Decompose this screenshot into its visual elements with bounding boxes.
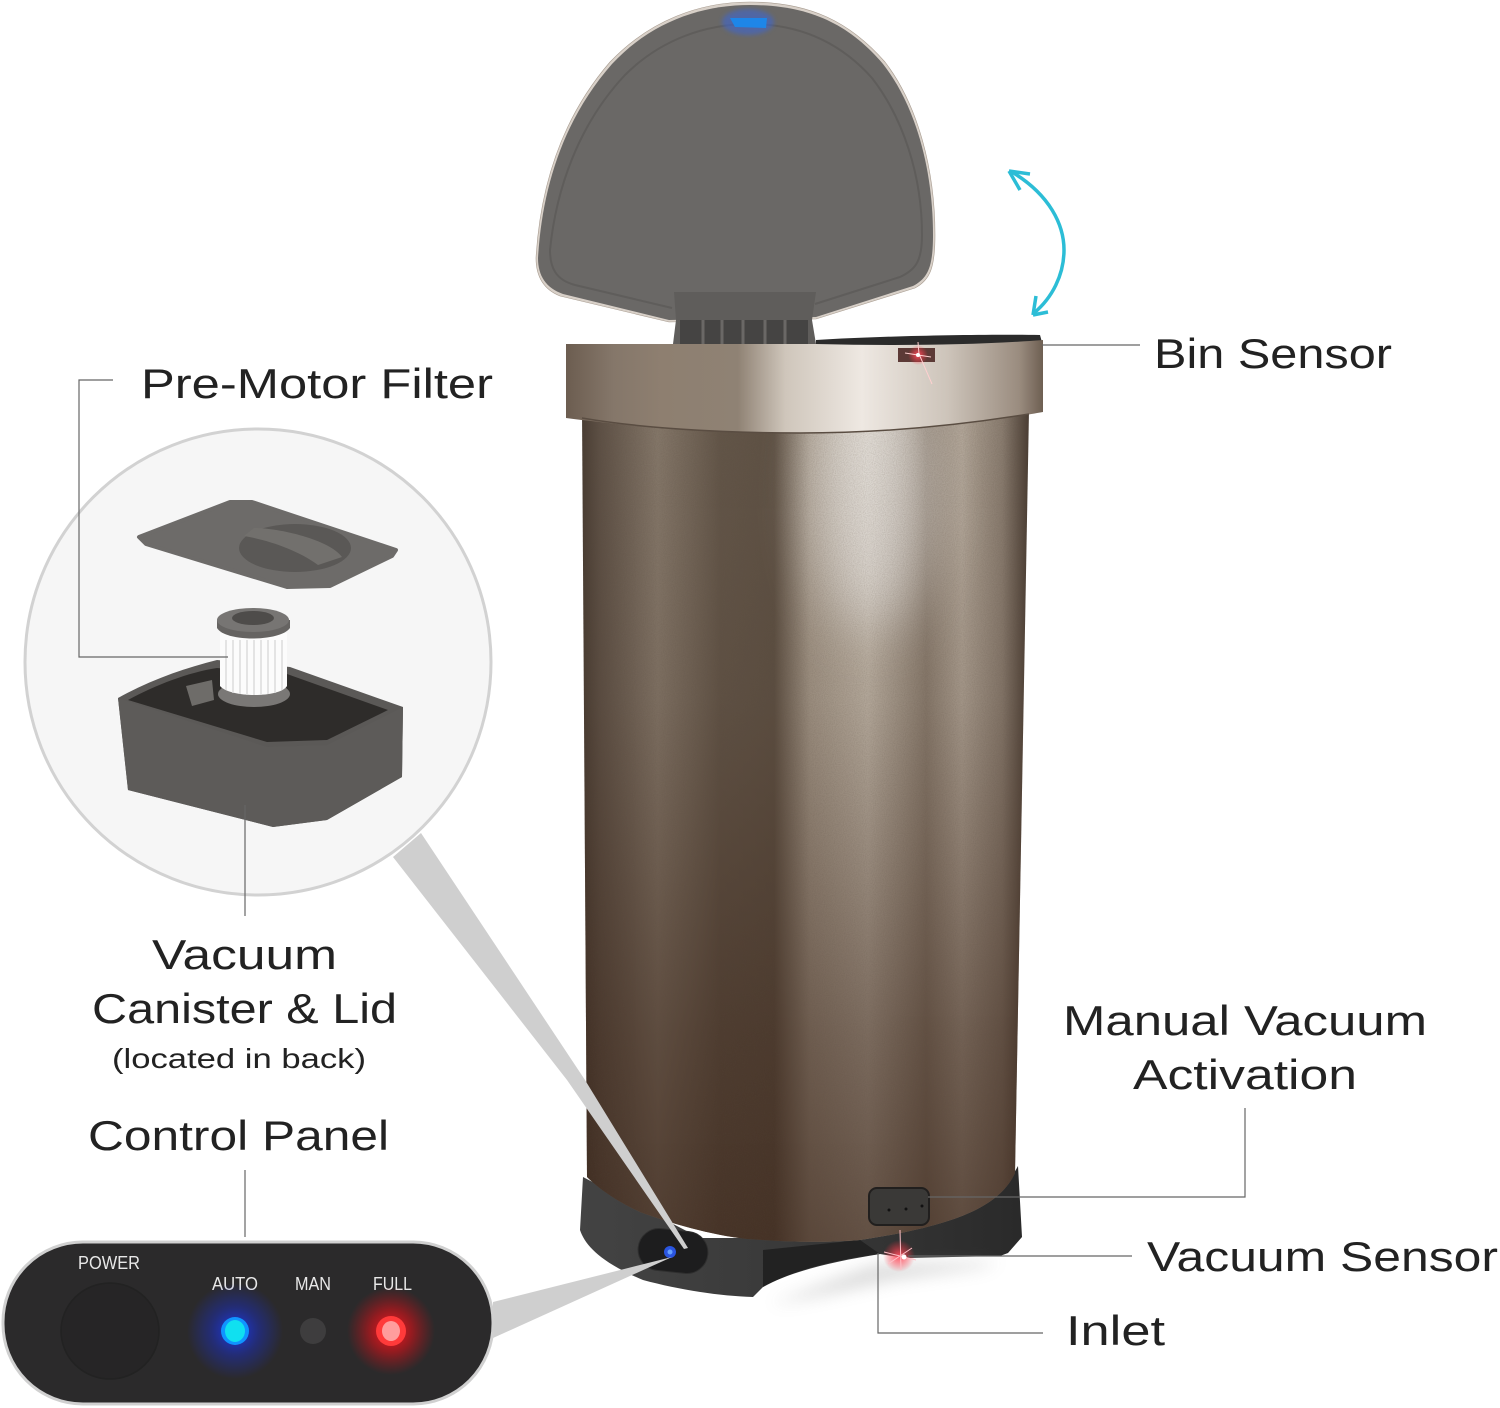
callout wedge: control panel bbox=[493, 1257, 672, 1338]
label: Pre-Motor Filter: Pre-Motor Filter bbox=[141, 360, 493, 407]
label: Inlet: Inlet bbox=[1066, 1307, 1165, 1354]
label: Vacuum Canister and Lid: Vacuum bbox=[152, 931, 337, 978]
lid hinge bbox=[673, 292, 816, 344]
full LED bbox=[347, 1287, 435, 1375]
man LED bbox=[300, 1318, 326, 1344]
label: Control Panel: Control Panel bbox=[88, 1112, 389, 1159]
icon: blue lid light bbox=[722, 9, 774, 35]
can body bbox=[582, 414, 1029, 1242]
canister box bbox=[118, 660, 403, 827]
trash can bbox=[536, 2, 1043, 1304]
label: AUTO: AUTO bbox=[212, 1274, 258, 1294]
filter cartridge bbox=[217, 608, 290, 707]
lid open bbox=[536, 2, 935, 344]
rim shadow line bbox=[582, 414, 1029, 433]
manual vacuum button bbox=[869, 1188, 929, 1225]
label: POWER: POWER bbox=[78, 1253, 140, 1273]
label: Vacuum Canister and Lid: (located in back) bbox=[112, 1043, 366, 1074]
base bbox=[580, 1166, 1022, 1297]
label: Manual Vacuum Activation bbox=[1063, 997, 1427, 1098]
black lid section bbox=[816, 335, 1043, 349]
small control panel bbox=[636, 1226, 710, 1276]
panel: control panel bbox=[3, 1242, 493, 1404]
label: Manual Vacuum Activation: Activation bbox=[1133, 1051, 1357, 1098]
label: Vacuum Canister and Lid: Canister & Lid bbox=[92, 985, 397, 1032]
label: Bin Sensor: Bin Sensor bbox=[1154, 330, 1392, 377]
label: MAN: MAN bbox=[295, 1274, 331, 1294]
panel: magnified canister circle bbox=[25, 429, 491, 895]
auto LED bbox=[187, 1283, 283, 1379]
rim bbox=[566, 340, 1043, 433]
arrow: lid motion bbox=[1009, 171, 1064, 315]
power button bbox=[61, 1283, 159, 1379]
label: Manual Vacuum Activation: Manual Vacuum bbox=[1063, 997, 1427, 1044]
leader lines bbox=[79, 345, 1245, 1333]
canister lid bbox=[139, 502, 396, 587]
bin sensor bbox=[898, 342, 935, 384]
label: FULL: FULL bbox=[373, 1274, 412, 1294]
inlet spark bbox=[883, 1230, 916, 1272]
callout wedge: canister magnifier to control panel bbox=[393, 833, 688, 1249]
label: Vacuum Sensor: Vacuum Sensor bbox=[1147, 1233, 1498, 1280]
base shadow bbox=[770, 1262, 1000, 1304]
label: Vacuum Canister and Lid bbox=[92, 931, 397, 1074]
